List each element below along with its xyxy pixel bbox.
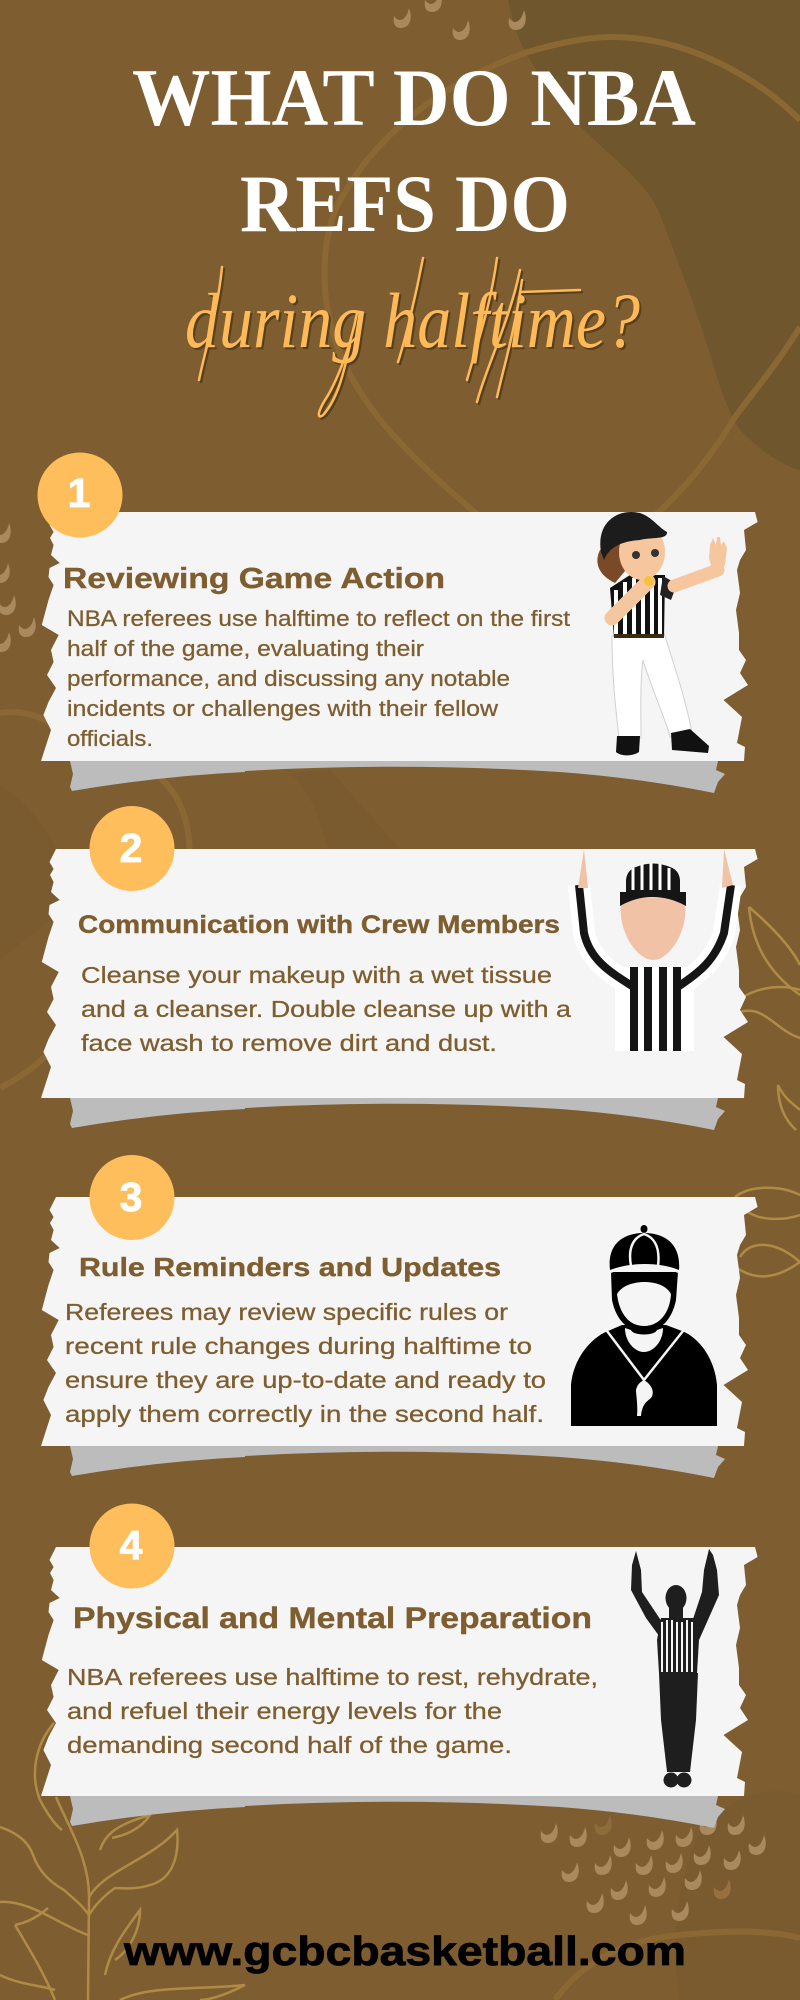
decorative plant bottom-left: [0, 1723, 245, 2000]
number badge 3: [90, 1155, 174, 1240]
body text 1: [67, 606, 570, 751]
decorative leaves right: [735, 907, 800, 1276]
body text 3: [65, 1299, 546, 1427]
body text 1: officials.: [67, 726, 153, 751]
body text 1: incidents or challenges with their fellow: [67, 696, 498, 721]
icon: referee silhouette with whistle: [571, 1225, 717, 1426]
panel 3: rule reminders and updates: [41, 1197, 758, 1478]
body text 2: Cleanse your makeup with a wet tissue: [81, 962, 552, 988]
footer website url: www.gcbcbasketball.com: [123, 1928, 686, 1974]
number badge 1: [38, 452, 122, 538]
number badge 4: 4: [120, 1522, 143, 1568]
body text 4: and refuel their energy levels for the: [67, 1698, 502, 1724]
title: REFS DO: [240, 158, 570, 249]
heading 2: Communication with Crew Members: [78, 911, 560, 939]
body text 3: Referees may review specific rules or: [65, 1299, 508, 1325]
body text 2: [81, 962, 571, 1056]
title: [132, 52, 696, 249]
icon: standing referee silhouette: [631, 1549, 719, 1788]
number badge 3: 3: [120, 1174, 142, 1220]
icon: cartoon referee with whistle: [597, 512, 727, 755]
heading 1: Reviewing Game Action: [63, 563, 445, 595]
heading 4: Physical and Mental Preparation: [73, 1602, 592, 1635]
body text 1: NBA referees use halftime to reflect on the first: [67, 606, 570, 631]
number badge 1: 1: [68, 470, 90, 516]
script subtitle: [185, 258, 640, 416]
body text 3: ensure they are up-to-date and ready to: [65, 1367, 546, 1393]
title: WHAT DO NBA: [132, 52, 696, 143]
heading 3: Rule Reminders and Updates: [79, 1252, 501, 1282]
panel 2: communication with crew members: [41, 849, 758, 1130]
panel 1: reviewing game action: [41, 512, 758, 793]
body text 4: [67, 1664, 598, 1758]
icon: referee touchdown signal: [578, 849, 733, 1051]
body text 2: and a cleanser. Double cleanse up with a: [81, 996, 571, 1022]
body text 4: NBA referees use halftime to rest, rehydrate,: [67, 1664, 598, 1690]
body text 1: half of the game, evaluating their: [67, 636, 424, 661]
body text 1: performance, and discussing any notable: [67, 666, 510, 691]
script subtitle: during halftime?: [185, 277, 640, 364]
body text 3: recent rule changes during halftime to: [65, 1333, 532, 1359]
number badge 2: [90, 806, 174, 891]
body text 2: face wash to remove dirt and dust.: [81, 1030, 497, 1056]
panel 4: physical and mental preparation: [41, 1547, 758, 1828]
body text 3: apply them correctly in the second half.: [65, 1401, 544, 1427]
number badge 4: [90, 1504, 174, 1588]
body text 4: demanding second half of the game.: [67, 1732, 512, 1758]
number badge 2: 2: [120, 825, 142, 871]
